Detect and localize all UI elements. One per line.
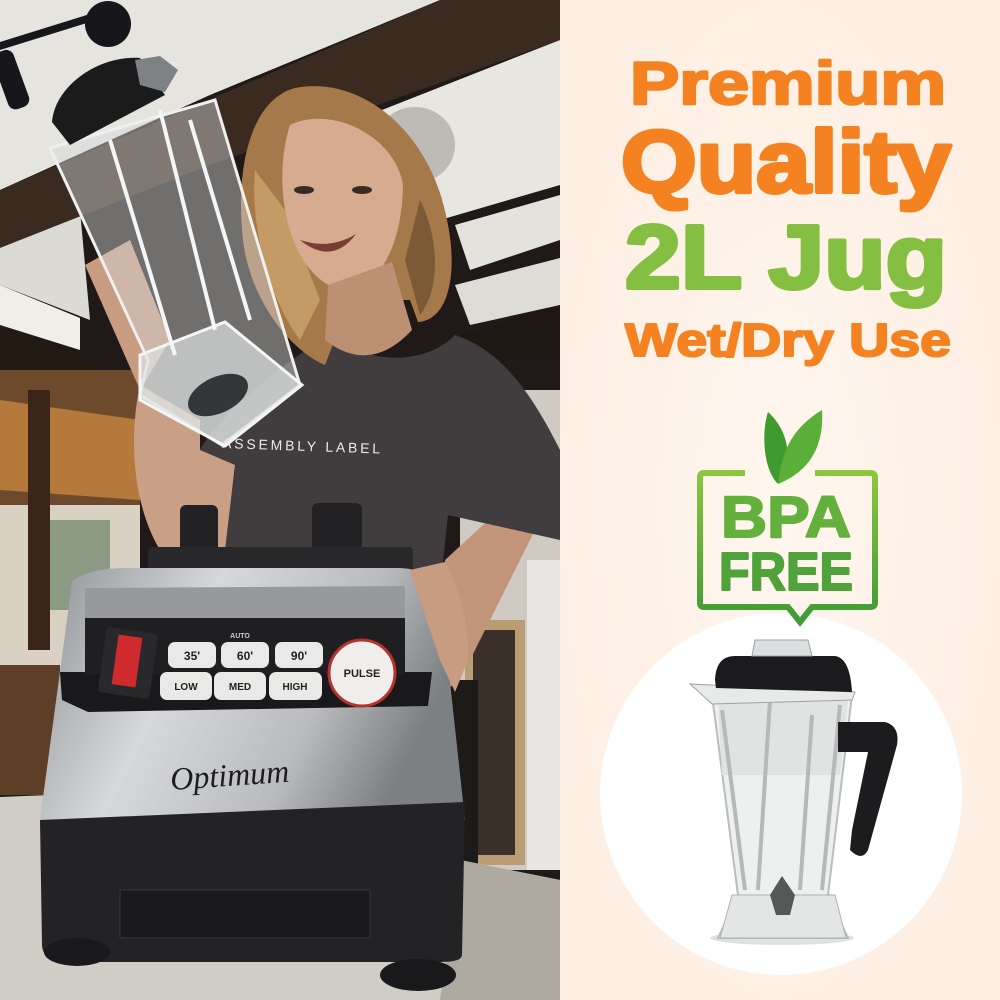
back room [0,370,140,670]
panel: photo of woman with blender [0,0,560,1000]
blender base: 60' [237,649,253,663]
icon: clear 2L blender jug [690,640,898,945]
icon: BPA free badge: FREE [719,542,853,602]
blender base: PULSE [344,668,380,680]
blender base [40,503,465,991]
blender base: HIGH [282,682,308,693]
switch [98,627,158,699]
shirt text: ASSEMBLY LABEL [222,435,383,457]
blender base: LOW [174,682,198,693]
buttons [160,642,323,700]
icon: product circle [600,613,962,975]
blender base: AUTO [230,633,250,640]
heading: Premium: Premium [630,50,946,117]
panel: right background [560,0,1000,1000]
icon: leaves [764,410,822,484]
heading: 2L Jug: 2L Jug [625,208,947,308]
right background fridge and shelf [460,390,560,870]
face [282,119,403,289]
t-shirt [195,335,560,590]
blender base: MED [229,682,251,693]
icon: BPA free badge [700,410,875,622]
held jug [50,56,302,446]
counter [0,795,560,1000]
hair [241,86,452,365]
track lights [0,1,131,112]
icon: BPA free badge: BPA [721,485,851,550]
arm right [445,500,535,692]
heading: Quality: Quality [621,112,951,211]
blender base: Optimum [169,753,290,797]
hand on base [410,562,468,692]
heading: Wet/Dry Use: Wet/Dry Use [625,314,951,366]
arm left [134,385,235,550]
blender base: 35' [184,649,200,663]
blender base: 90' [291,649,307,663]
